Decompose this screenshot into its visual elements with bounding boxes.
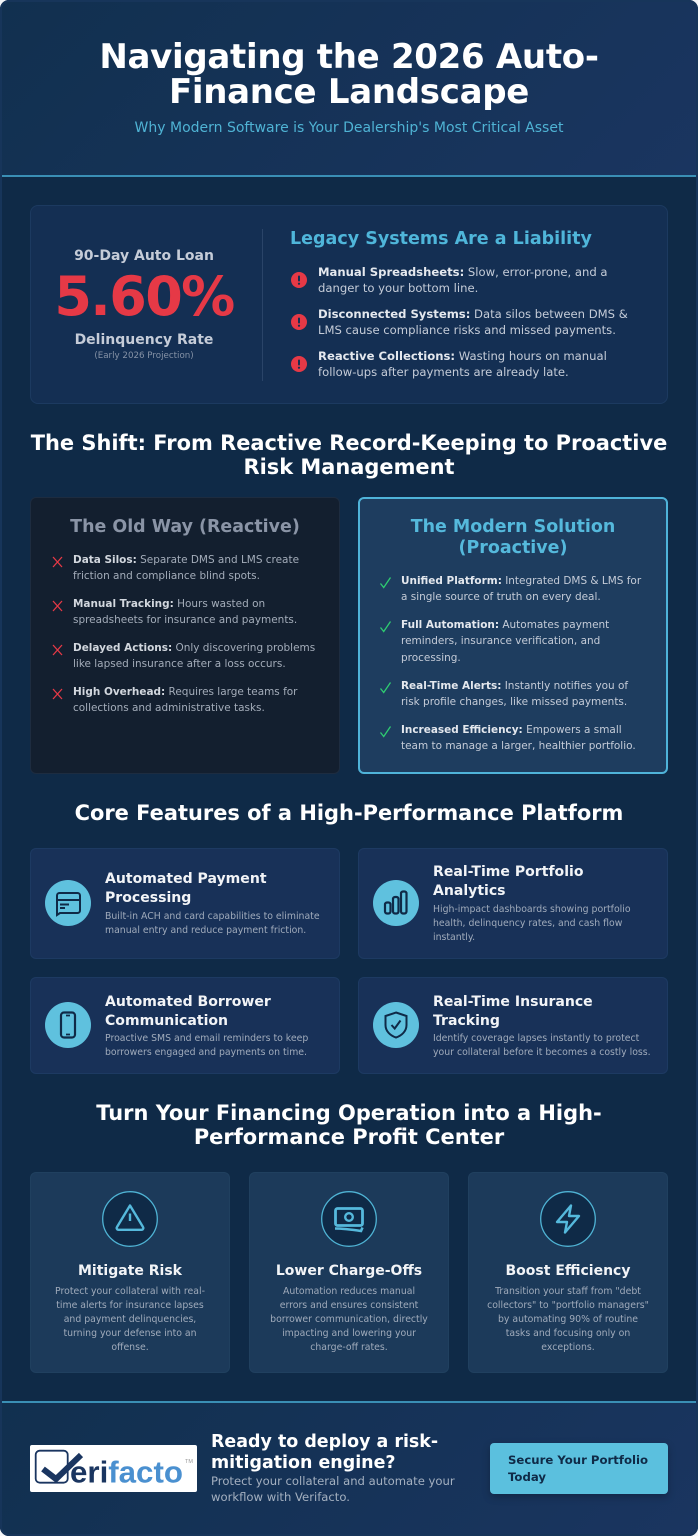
benefit description <box>469 1285 667 1355</box>
feature card: automated borrower communication <box>30 977 340 1074</box>
icon: alert <box>291 314 307 330</box>
text <box>105 871 320 936</box>
feature title: Analytics <box>433 883 506 899</box>
list item: unified platform <box>380 575 642 603</box>
button label: Secure Your Portfolio <box>508 1453 648 1467</box>
icon: warning <box>102 1191 158 1247</box>
stat value: 5.60% <box>54 265 234 328</box>
text <box>401 680 628 708</box>
text <box>73 554 299 582</box>
title <box>99 37 599 112</box>
icon: cross <box>52 556 62 568</box>
benefit card: mitigate risk <box>30 1172 230 1373</box>
feature description: instantly. <box>433 932 475 943</box>
text: Real-Time Alerts: Instantly notifies you of <box>401 680 628 692</box>
text <box>73 642 315 670</box>
text: processing. <box>401 652 461 664</box>
subtitle: Why Modern Software is Your Dealership's Most Critical Asset <box>135 120 563 136</box>
footer panel <box>0 1401 698 1536</box>
button label: Today <box>508 1470 546 1484</box>
text <box>105 993 335 1067</box>
feature title <box>433 993 593 1030</box>
feature description <box>433 903 631 945</box>
list item: high overhead <box>52 686 298 714</box>
feature description: health, delinquency rates, and cash flow <box>433 918 622 929</box>
text <box>433 993 663 1067</box>
text <box>401 619 609 664</box>
header panel <box>0 0 698 177</box>
list item: data silos <box>52 554 299 582</box>
icon: bar chart <box>373 880 419 926</box>
list item: reactive collections <box>291 349 607 379</box>
heading: the shift <box>30 431 667 479</box>
heading: legacy systems: Legacy Systems Are a Liability <box>290 229 592 249</box>
feature title: Real-Time Portfolio <box>433 864 583 880</box>
feature card: automated payment processing <box>30 848 340 959</box>
footer heading: Ready to deploy a risk- <box>211 1432 438 1452</box>
text: Manual Spreadsheets: Slow, error-prone, and a <box>318 265 608 279</box>
text: collections and administrative tasks. <box>73 702 265 714</box>
benefit description: and payment delinquencies, <box>64 1314 196 1325</box>
text: a single source of truth on every deal. <box>401 591 601 603</box>
stat label bottom: Delinquency Rate <box>75 332 213 348</box>
text: Disconnected Systems: Data silos between DMS & <box>318 307 628 321</box>
benefit description <box>31 1285 229 1355</box>
benefit description: Automation reduces manual <box>283 1286 415 1297</box>
text <box>318 349 607 379</box>
heading: core features: Core Features of a High-Performance Platform <box>75 801 623 825</box>
benefit description: tasks and focusing only on <box>506 1328 630 1339</box>
button label <box>508 1452 648 1485</box>
text <box>318 265 608 295</box>
text: High Overhead: Requires large teams for <box>73 686 297 698</box>
footer heading <box>211 1432 438 1474</box>
text: LMS cause compliance risks and missed payments. <box>318 323 616 337</box>
benefit description: exceptions. <box>541 1342 595 1353</box>
feature title: Automated Payment <box>105 871 267 887</box>
logo: Verifacto <box>30 1445 197 1492</box>
benefit description: by automating 90% of routine <box>498 1314 638 1325</box>
feature title: Automated Borrower <box>105 994 271 1010</box>
footer text <box>211 1430 481 1510</box>
feature description: manual entry and reduce payment friction. <box>105 925 306 936</box>
text <box>401 724 636 752</box>
text: friction and compliance blind spots. <box>73 570 260 582</box>
icon: cash <box>321 1191 377 1247</box>
benefit card: lower charge-offs <box>249 1172 449 1373</box>
icon: check <box>380 726 391 738</box>
text: Increased Efficiency: Empowers a small <box>401 724 622 736</box>
feature description: borrowers engaged and payments on time. <box>105 1047 307 1058</box>
icon: check <box>380 577 391 588</box>
stat label top: 90-Day Auto Loan <box>74 248 214 264</box>
heading: the shift: Risk Management <box>243 455 455 479</box>
benefit description: Protect your collateral with real- <box>55 1286 205 1297</box>
text: reminders, insurance verification, and <box>401 635 600 647</box>
benefit description <box>250 1285 448 1355</box>
text <box>433 863 663 951</box>
feature description <box>105 1032 308 1060</box>
text <box>73 598 297 626</box>
benefit description: time alerts for insurance lapses <box>56 1300 204 1311</box>
text: Full Automation: Automates payment <box>401 619 609 631</box>
heading: old way: The Old Way (Reactive) <box>70 517 300 537</box>
icon: alert <box>291 272 307 288</box>
icon: cross <box>52 688 62 700</box>
title: Finance Landscape <box>169 72 529 112</box>
button: secure your portfolio <box>490 1443 668 1494</box>
panel: old way <box>30 497 340 774</box>
list item: disconnected systems <box>291 307 628 337</box>
text: Data Silos: Separate DMS and LMS create <box>73 554 299 566</box>
stat note: (Early 2026 Projection) <box>94 351 194 361</box>
icon: phone <box>45 1002 91 1048</box>
benefit description: Transition your staff from "debt <box>495 1286 641 1297</box>
text <box>73 686 298 714</box>
icon: payment card <box>45 880 91 926</box>
footer description: workflow with Verifacto. <box>211 1490 350 1504</box>
heading: modern solution <box>410 517 615 558</box>
text <box>318 307 628 337</box>
feature description: your collateral before it becomes a costly loss. <box>433 1047 651 1058</box>
benefit description: errors and ensures consistent <box>280 1300 418 1311</box>
text: Manual Tracking: Hours wasted on <box>73 598 265 610</box>
list item: full automation <box>380 619 609 664</box>
feature title: Processing <box>105 890 191 906</box>
footer description <box>211 1473 455 1506</box>
footer heading: mitigation engine? <box>211 1453 396 1473</box>
text: Unified Platform: Integrated DMS & LMS for <box>401 575 641 587</box>
benefit description: offense. <box>111 1342 149 1353</box>
benefit description: collectors" to "portfolio managers" <box>487 1300 649 1311</box>
text <box>401 575 642 603</box>
icon: lightning bolt <box>540 1191 596 1247</box>
feature title: Real-Time Insurance <box>433 994 593 1010</box>
footer description: Protect your collateral and automate your <box>211 1474 455 1488</box>
heading: profit center: Turn Your Financing Operation into a High- <box>96 1101 602 1125</box>
panel: delinquency and legacy systems <box>30 205 668 404</box>
list item: real-time alerts <box>380 680 628 708</box>
stat: delinquency rate <box>54 248 234 361</box>
feature title <box>105 993 271 1030</box>
benefit description: borrower communication, directly <box>270 1314 428 1325</box>
logo: Verifacto: erifacto <box>70 1454 183 1490</box>
feature description <box>433 1032 651 1060</box>
logo: Verifacto: TM <box>185 1459 193 1465</box>
text: team to manage a larger, healthier portfolio. <box>401 740 636 752</box>
text: danger to your bottom line. <box>318 281 478 295</box>
feature description: Proactive SMS and email reminders to keep <box>105 1033 308 1044</box>
benefit title: Mitigate Risk <box>78 1263 182 1279</box>
feature description: Identify coverage lapses instantly to protect <box>433 1033 639 1044</box>
benefit description: impacting and lowering your <box>282 1328 416 1339</box>
text: spreadsheets for insurance and payments. <box>73 614 297 626</box>
panel: modern solution <box>358 497 668 774</box>
heading: modern solution: (Proactive) <box>459 538 567 558</box>
benefit title: Boost Efficiency <box>506 1263 630 1279</box>
icon: cross <box>52 644 62 656</box>
feature title <box>433 863 583 900</box>
list item: delayed actions <box>52 642 315 670</box>
icon: cross <box>52 600 62 612</box>
feature title: Tracking <box>433 1013 500 1029</box>
heading: the shift: The Shift: From Reactive Record-Keeping to Proactive <box>31 431 667 455</box>
title: Navigating the 2026 Auto- <box>99 37 599 77</box>
feature title <box>105 871 267 906</box>
icon: check <box>380 682 391 694</box>
text: risk profile changes, like missed payments. <box>401 696 627 708</box>
benefit card: boost efficiency <box>468 1172 668 1373</box>
heading: modern solution: The Modern Solution <box>411 517 615 537</box>
benefit title: Lower Charge-Offs <box>276 1263 422 1279</box>
feature description: High-impact dashboards showing portfolio <box>433 904 631 915</box>
text: follow-ups after payments are already late. <box>318 365 569 379</box>
icon: check <box>380 621 391 632</box>
icon: shield check <box>373 1002 419 1048</box>
feature description: Built-in ACH and card capabilities to eliminate <box>105 911 320 922</box>
list item: manual tracking <box>52 598 297 626</box>
feature title: Communication <box>105 1013 228 1029</box>
benefit description: turning your defense into an <box>63 1328 197 1339</box>
feature card: real-time insurance tracking <box>358 977 668 1074</box>
heading: profit center <box>0 1101 698 1149</box>
feature description <box>105 910 320 938</box>
text: Delayed Actions: Only discovering problems <box>73 642 315 654</box>
icon: alert <box>291 356 307 372</box>
list item: increased efficiency <box>380 724 636 752</box>
list item: manual spreadsheets <box>291 265 608 295</box>
text: like lapsed insurance after a loss occurs. <box>73 658 286 670</box>
benefit description: charge-off rates. <box>310 1342 388 1353</box>
text: Reactive Collections: Wasting hours on manual <box>318 349 607 363</box>
heading: profit center: Performance Profit Center <box>194 1125 504 1149</box>
feature card: real-time portfolio analytics <box>358 848 668 959</box>
